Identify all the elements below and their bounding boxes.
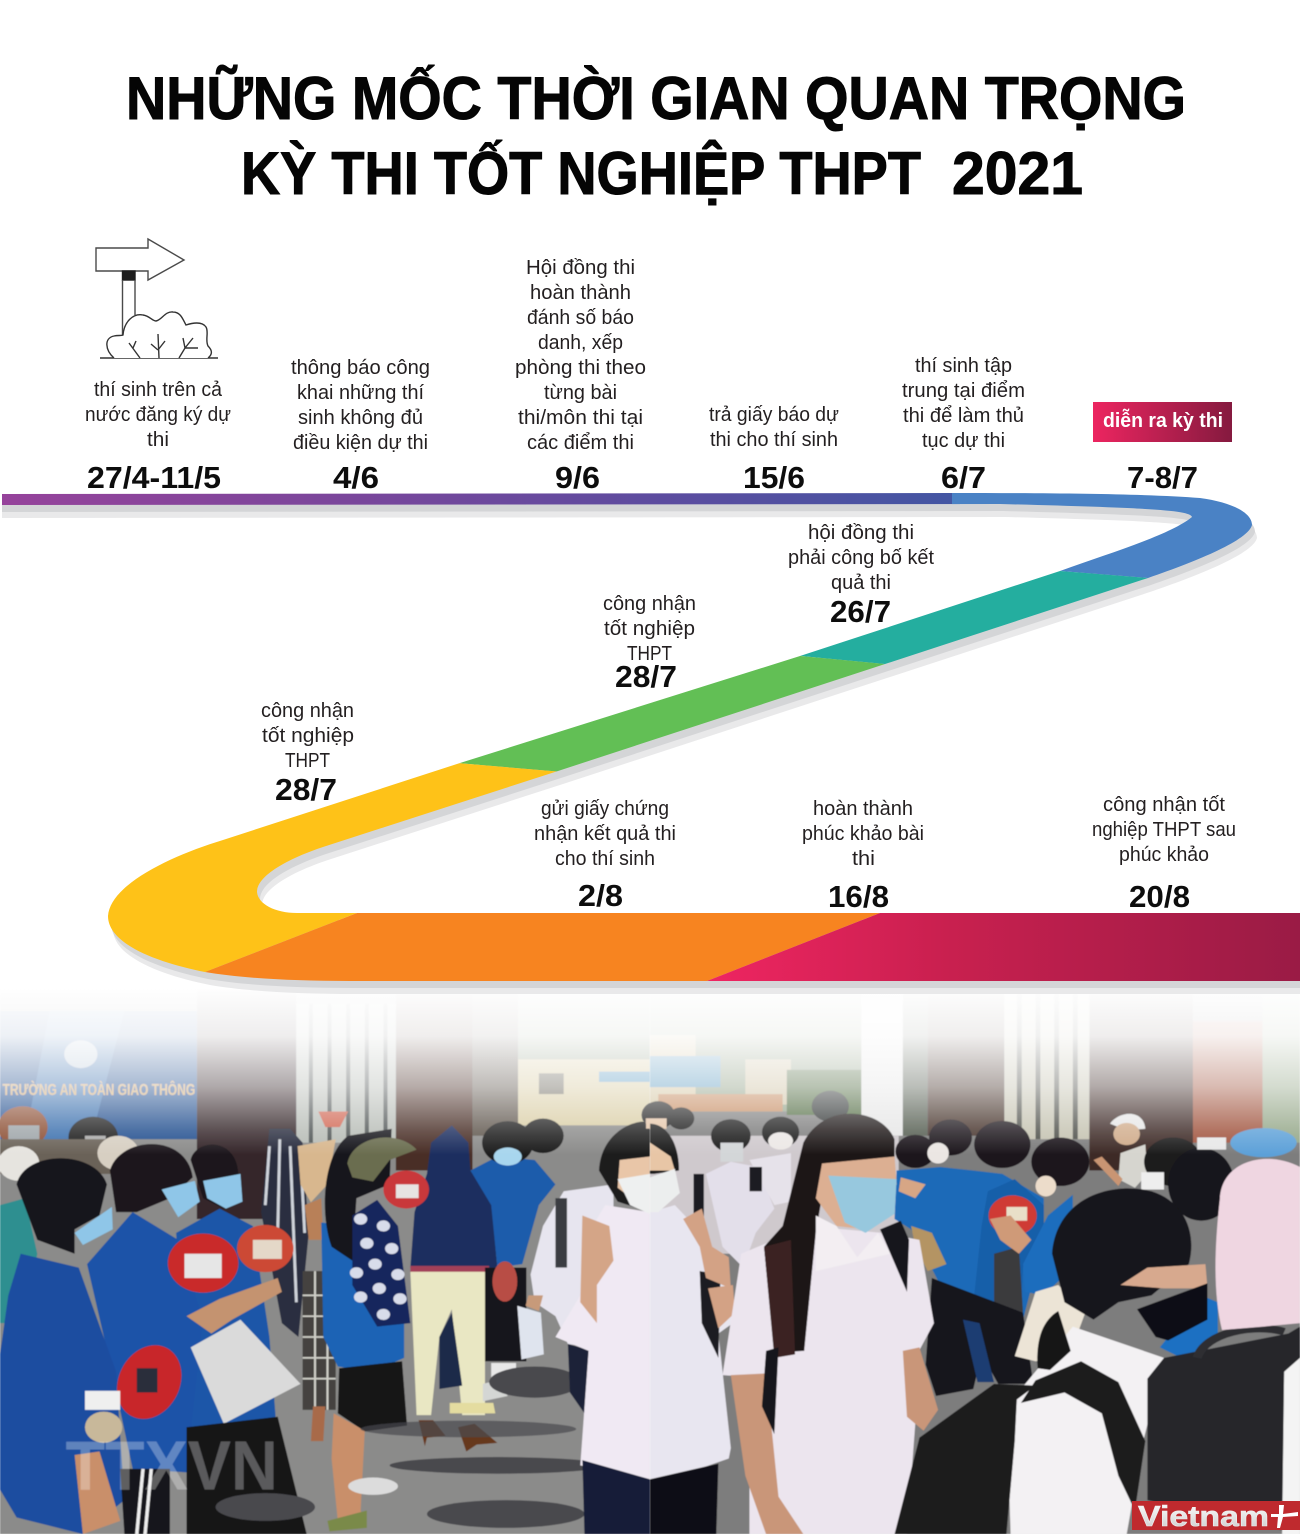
main girl <box>723 1226 934 1534</box>
milestone: 6/7: trung tại điểm <box>902 380 1025 402</box>
milestone: 4/6: khai những thí <box>297 382 424 404</box>
milestone: 9/6: hoàn thành <box>530 282 631 304</box>
title: NHỮNG MỐC THỜI GIAN QUAN TRỌNG <box>126 65 1186 132</box>
milestone: 9/6: đánh số báo <box>527 307 634 329</box>
bag <box>191 1320 301 1424</box>
TTXVN watermark: TTXVN <box>65 1428 278 1505</box>
red hat behind <box>318 1111 348 1127</box>
background heads <box>0 1106 48 1140</box>
milestone: 6/7: thi để làm thủ <box>903 405 1024 427</box>
milestone: 15/6: trả giấy báo dự <box>709 404 839 426</box>
milestone: 28/7 upper: công nhận <box>603 593 696 615</box>
milestone: 27/4-11/5 <box>85 379 231 495</box>
milestone: 16/8: hoàn thành <box>813 798 913 820</box>
front-left blue students <box>176 1209 276 1441</box>
milestone: 2/8: nhận kết quả thi <box>534 823 676 845</box>
ground shadows <box>216 1366 605 1528</box>
milestone: 16/8: thi <box>852 848 875 870</box>
milestone: 26/7: hội đồng thi <box>808 522 914 544</box>
milestone: 4/6 <box>291 357 430 495</box>
milestone: 16/8 <box>802 798 924 914</box>
milestone: 9/6: thi/môn thi tại <box>518 407 643 429</box>
title: 2021 <box>952 140 1083 207</box>
background photo of students at the school gate <box>0 985 1300 1534</box>
road colour segments <box>0 480 1300 990</box>
milestone: 28/7 lower: 28/7 <box>275 772 337 807</box>
milestone: 20/8 <box>1092 794 1236 914</box>
man in cap <box>1110 1114 1145 1131</box>
logo: Vietnam+: Vietnam <box>1138 1501 1269 1533</box>
crowd far <box>650 1136 899 1254</box>
milestone: 4/6: thông báo công <box>291 357 430 379</box>
front girl <box>555 1205 650 1481</box>
milestone: 28/7 upper: tốt nghiệp <box>604 618 695 640</box>
milestone: 4/6: sinh không đủ <box>298 407 423 429</box>
icon: signpost arrow and bush <box>96 239 218 358</box>
milestone: 20/8: công nhận tốt <box>1103 794 1225 816</box>
milestone: 2/8: gửi giấy chứng <box>541 798 669 820</box>
photo: left half: TRƯỜNG AN TOÀN GIAO THÔNG <box>2 1079 195 1098</box>
pink hijab <box>1216 1159 1300 1330</box>
milestone: 7-8/7 with highlighted badge: 7-8/7 <box>1127 460 1198 495</box>
milestone: 28/7 upper: THPT <box>627 643 672 665</box>
milestone: 9/6: từng bài <box>544 382 617 404</box>
milestone: 28/7 upper: 28/7 <box>615 659 677 694</box>
timeline road with shadow <box>0 480 1300 994</box>
black legs <box>187 1417 307 1534</box>
conical hat <box>298 1139 336 1202</box>
milestone: 15/6: 15/6 <box>743 460 805 495</box>
milestone: 2/8: cho thí sinh <box>555 848 655 870</box>
milestone: 6/7: tục dự thi <box>922 430 1005 452</box>
milestone: 20/8: phúc khảo <box>1119 844 1209 866</box>
milestone: 26/7: phải công bố kết <box>788 547 934 569</box>
hooded navy person <box>410 1125 497 1268</box>
milestone: 28/7 upper <box>603 593 696 694</box>
girl with helmet <box>321 1222 404 1372</box>
milestone: 2/8: 2/8 <box>578 878 623 913</box>
milestone: 6/7: 6/7 <box>941 460 986 495</box>
milestone: 28/7 lower: tốt nghiệp <box>262 725 354 747</box>
milestone: 28/7 lower: công nhận <box>261 700 354 722</box>
milestone: 9/6 <box>515 257 646 495</box>
milestone: 15/6 <box>709 404 839 495</box>
milestone: 9/6: các điểm thi <box>527 432 634 454</box>
milestone: 9/6: 9/6 <box>555 460 600 495</box>
back boy <box>1006 1327 1164 1534</box>
striped person <box>261 1129 309 1337</box>
photo: left half <box>0 990 650 1534</box>
milestone: 7-8/7 with highlighted badge <box>1093 402 1232 495</box>
milestone: 27/4-11/5: thi <box>147 429 169 451</box>
milestone: 6/7 <box>902 355 1025 495</box>
milestone: 4/6: điều kiện dự thi <box>293 432 428 454</box>
student in white shirt <box>531 1184 613 1351</box>
milestone: 20/8: 20/8 <box>1129 879 1190 914</box>
white tote <box>1015 1285 1085 1361</box>
title <box>126 65 1186 207</box>
milestone: 15/6: thi cho thí sinh <box>710 429 838 451</box>
milestone: 28/7 lower <box>261 700 354 807</box>
right student with blue collar <box>1160 1295 1218 1360</box>
photo: right half <box>642 990 1300 1534</box>
milestone: 9/6: phòng thi theo <box>515 357 646 379</box>
blue students <box>895 1167 1044 1327</box>
milestone: 9/6: danh, xếp <box>538 332 623 354</box>
left girl continued <box>650 1205 733 1479</box>
hand and arm <box>187 1278 282 1334</box>
road shadow <box>2 500 1300 994</box>
milestone: 16/8: 16/8 <box>828 879 889 914</box>
milestone: 4/6: 4/6 <box>333 460 379 495</box>
milestone: 20/8: nghiệp THPT sau <box>1092 819 1236 841</box>
milestone: 2/8 <box>534 798 676 913</box>
fans <box>168 1234 238 1293</box>
blue student group behind <box>470 1157 555 1268</box>
milestone: 28/7 lower: THPT <box>285 750 330 772</box>
logo: Vietnam+ <box>1132 1501 1300 1533</box>
milestone: 16/8: phúc khảo bài <box>802 823 924 845</box>
milestone: 6/7: thí sinh tập <box>915 355 1012 377</box>
milestone: 26/7 <box>788 522 934 629</box>
milestone: 9/6: Hội đồng thi <box>526 257 635 279</box>
milestone: 7-8/7 with highlighted badge: diễn ra kỳ thi <box>1103 408 1223 432</box>
title: KỲ THI TỐT NGHIỆP THPT <box>241 140 921 207</box>
dark legs <box>926 1278 1033 1396</box>
milestone: 26/7: quả thi <box>831 572 891 594</box>
milestone: 27/4-11/5: 27/4-11/5 <box>87 460 221 495</box>
milestone: 27/4-11/5: thí sinh trên cả <box>94 379 223 401</box>
white fade over the top of the photo <box>0 985 1300 1155</box>
milestone: 26/7: 26/7 <box>830 594 891 629</box>
milestone: 27/4-11/5: nước đăng ký dự <box>85 404 231 426</box>
